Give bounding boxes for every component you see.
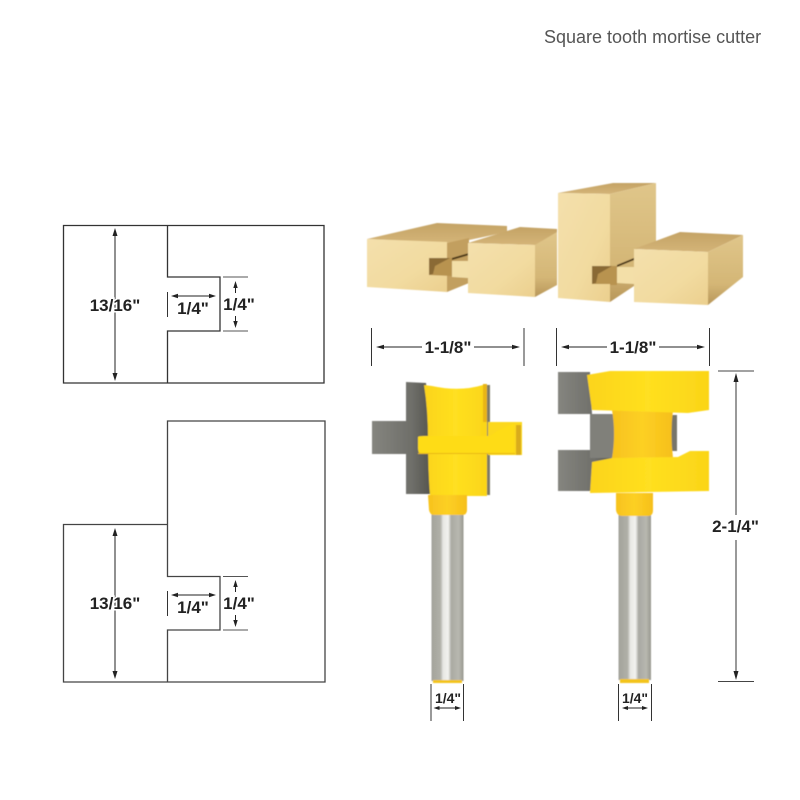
- joint outline: [64, 226, 324, 383]
- width dimension left 1-1/8: 1-1/8": [425, 338, 471, 357]
- router bit right: [558, 371, 709, 683]
- overall length dimension 2-1/4: [712, 371, 759, 682]
- neck body: [612, 410, 673, 458]
- joint outline: [64, 421, 325, 682]
- width dimension left 1-1/8: [372, 328, 524, 366]
- upper flange: [587, 371, 709, 413]
- slot dimension 1/4: 1/4": [223, 295, 255, 314]
- shank: [432, 512, 464, 681]
- title: Square tooth mortise cutter: [544, 27, 761, 47]
- shank dimension left 1/4: 1/4": [435, 690, 461, 706]
- wood joint samples: [367, 183, 743, 305]
- shank tip: [620, 679, 649, 683]
- overall length dimension 2-1/4: 2-1/4": [712, 517, 759, 536]
- width dimension right 1-1/8: 1-1/8": [610, 338, 656, 357]
- slot dimension 1/4: [223, 576, 255, 630]
- carbide cutter: [372, 382, 490, 495]
- yellow body: [418, 384, 522, 515]
- height dimension 13/16: [90, 228, 140, 381]
- neck: [616, 493, 653, 516]
- width dimension 1/4: [168, 292, 216, 318]
- slot dimension 1/4: 1/4": [223, 594, 255, 613]
- height dimension 13/16: [90, 528, 140, 679]
- width dimension 1/4: [168, 591, 216, 617]
- left wood joint: [367, 223, 557, 297]
- width dimension 1/4: 1/4": [177, 299, 209, 318]
- lower flange: [590, 451, 709, 493]
- shank dimension right 1/4: 1/4": [622, 690, 648, 706]
- slot dimension 1/4: [223, 277, 255, 331]
- shank: [618, 512, 651, 680]
- carbide cutter: [558, 372, 677, 491]
- height dimension 13/16: 13/16": [90, 594, 140, 613]
- diagram: bottom joint profile: [64, 421, 325, 682]
- width dimension right 1-1/8: [556, 328, 710, 366]
- router bit left: [372, 382, 522, 683]
- diagram: top joint profile: [64, 226, 324, 383]
- shank dimension right 1/4: [618, 684, 652, 721]
- width dimension 1/4: 1/4": [177, 598, 209, 617]
- height dimension 13/16: 13/16": [90, 296, 140, 315]
- shank dimension left 1/4: [431, 684, 464, 721]
- shank tip: [433, 680, 462, 683]
- right wood joint: [558, 183, 743, 305]
